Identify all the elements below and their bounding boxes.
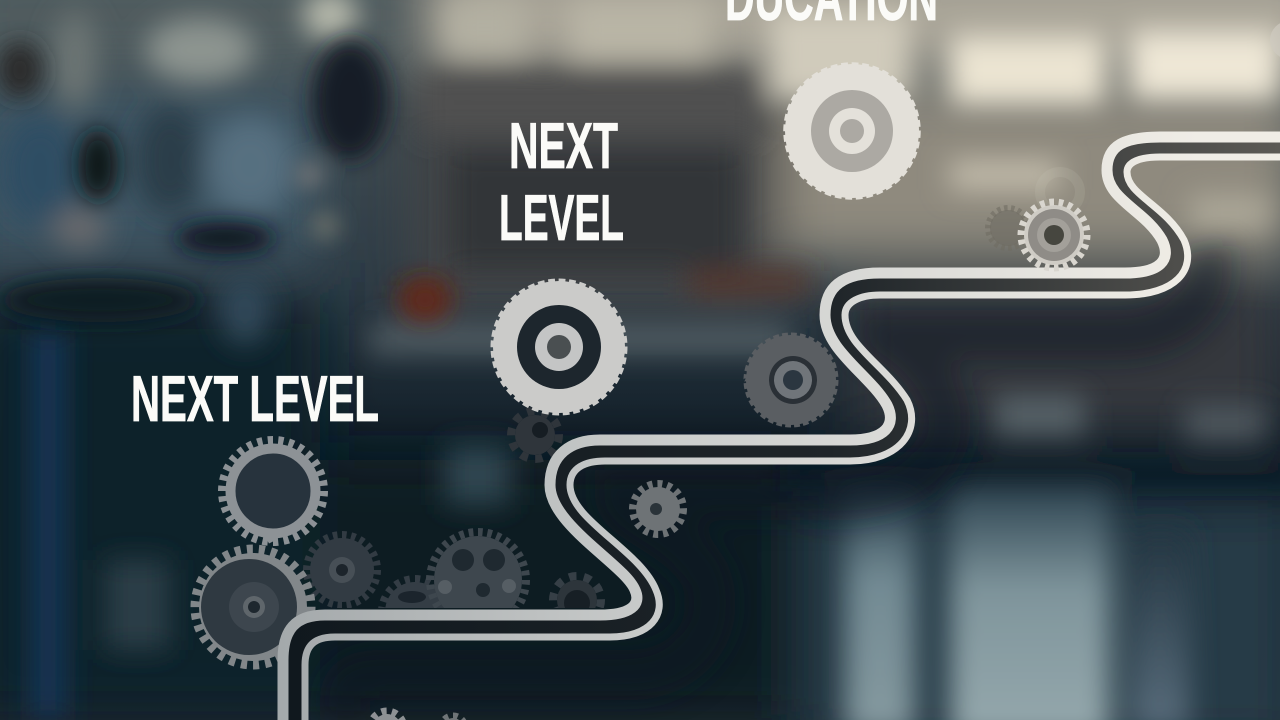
gears: partial gears at bottom edge [370,711,465,720]
gear wheel: first milestone [492,280,626,414]
road: inner line [305,157,1280,720]
label: next level (two lines): NEXT [509,109,618,182]
gear: small gear under road bend [633,484,683,534]
label: next level (two lines): LEVEL [499,181,624,254]
road: dark band between lines [294,147,1280,720]
gear: open ring gear [222,440,324,542]
road shadow [345,250,1207,720]
gear: large gear with dark core [195,549,311,665]
label: next level (two lines) [499,109,624,254]
gear wheel: top milestone [784,64,920,198]
gear wheel: gray milestone [745,334,837,426]
gear: dark gear behind next level wheel [511,411,559,459]
label: next level (one line): NEXT LEVEL [131,362,379,435]
road: outer line [283,137,1280,720]
gear cluster: dark gears resting on road [303,528,605,608]
gear: partial gear at right edge [1270,21,1280,59]
gear: silver gear on upper road [1021,202,1087,268]
gear: faint background gears upper right [988,172,1080,248]
